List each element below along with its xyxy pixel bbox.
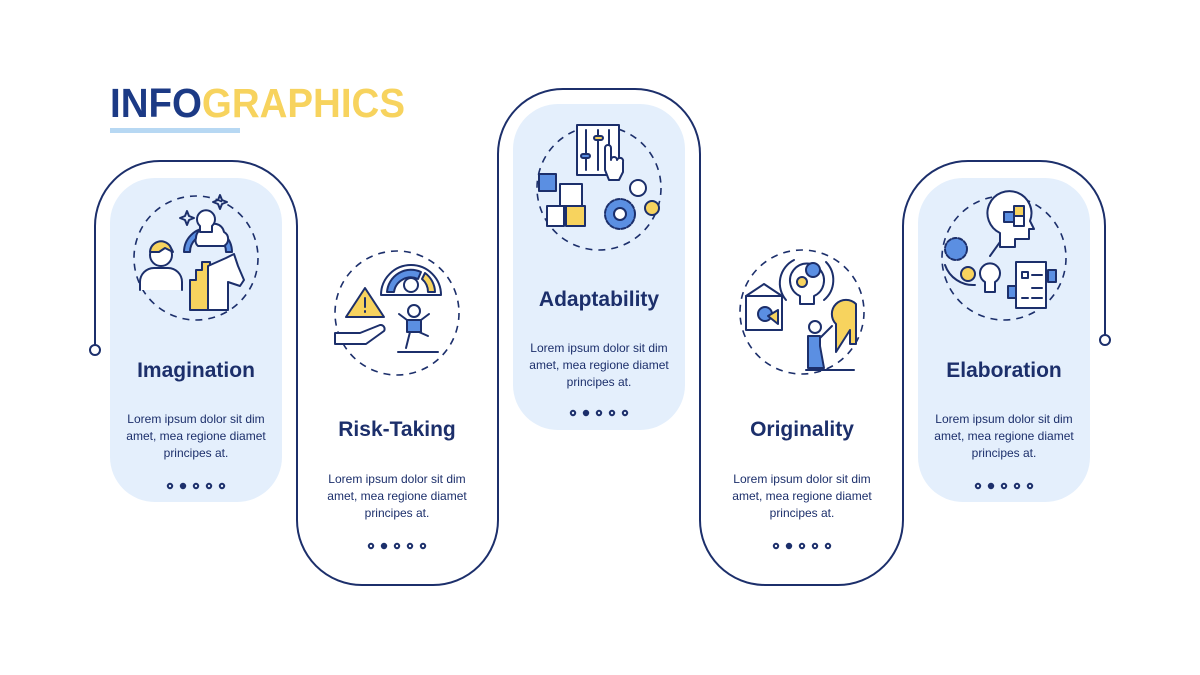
text: elaboration: Lorem ipsum dolor sit dim [935, 412, 1073, 426]
dots: imagination [168, 484, 224, 488]
text: risk-taking: principes at. [365, 506, 429, 520]
heading: adaptability: Adaptability [539, 288, 659, 311]
text: risk-taking: amet, mea regione diamet [327, 489, 467, 503]
text: originality: amet, mea regione diamet [732, 489, 872, 503]
text: adaptability: principes at. [567, 375, 631, 389]
text: imagination: principes at. [164, 446, 228, 460]
dots: originality [774, 544, 830, 548]
dots: elaboration [976, 484, 1032, 488]
icon: adaptability [537, 125, 661, 250]
text: originality: principes at. [770, 506, 834, 520]
icon: elaboration [942, 191, 1066, 320]
icon: imagination [134, 195, 258, 320]
heading: elaboration: Elaboration [946, 359, 1062, 382]
text: adaptability: amet, mea regione diamet [529, 358, 669, 372]
text: imagination: Lorem ipsum dolor sit dim [127, 412, 265, 426]
text: elaboration: amet, mea regione diamet [934, 429, 1074, 443]
text: adaptability: Lorem ipsum dolor sit dim [530, 341, 668, 355]
icon: originality [740, 250, 864, 374]
dots: adaptability [571, 411, 627, 415]
heading: originality: Originality [750, 418, 854, 441]
panel fills [110, 104, 1090, 502]
icon: risk-taking [335, 251, 459, 375]
text: elaboration: principes at. [972, 446, 1036, 460]
serpentine connector line [90, 89, 1110, 585]
text: risk-taking: Lorem ipsum dolor sit dim [328, 472, 466, 486]
text: originality: Lorem ipsum dolor sit dim [733, 472, 871, 486]
heading: imagination: Imagination [137, 359, 255, 382]
heading: risk-taking: Risk-Taking [338, 418, 456, 441]
text: imagination: amet, mea regione diamet [126, 429, 266, 443]
dots: risk-taking [369, 544, 425, 548]
title: INFOGRAPHICS [110, 80, 405, 126]
